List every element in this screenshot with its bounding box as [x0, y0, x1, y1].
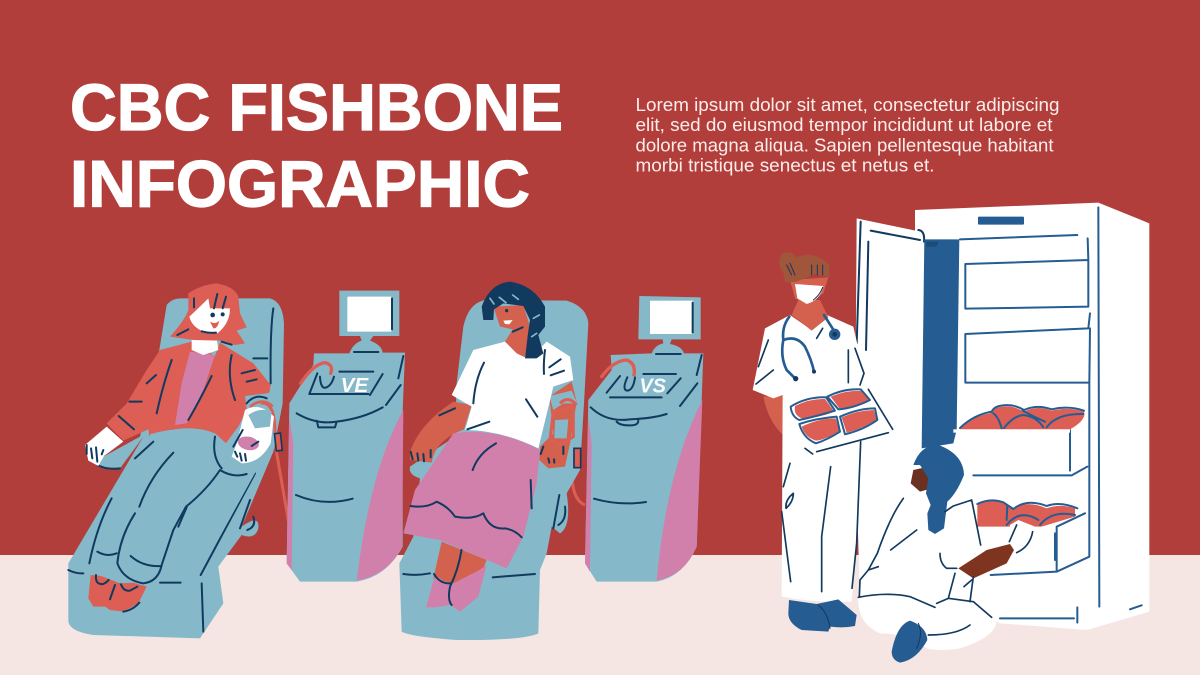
blood bags [791, 389, 877, 443]
neck [792, 300, 828, 331]
body [858, 492, 1033, 650]
arm left [410, 402, 472, 463]
shirt [452, 342, 573, 448]
tube clip [574, 448, 581, 468]
blood storage fridge [855, 203, 1149, 630]
tube and clip [260, 403, 275, 433]
description text: morbi tristique senectus et netus et. [636, 156, 934, 176]
chair 2 [399, 300, 588, 640]
description text [636, 95, 1060, 176]
brown arm [958, 544, 1014, 578]
open door [855, 218, 925, 467]
shoes [88, 575, 147, 612]
title: INFOGRAPHIC [70, 146, 530, 220]
nurse with blood tray [753, 253, 893, 632]
shoes [426, 565, 487, 612]
uniform lines [756, 328, 864, 592]
machine 1 [275, 291, 405, 582]
crouching worker reaching into fridge [858, 444, 1035, 663]
hair [482, 282, 545, 358]
nurse hair [779, 253, 829, 283]
left hand [85, 427, 123, 466]
woman in white shirt on donation chair [399, 282, 588, 640]
face [189, 298, 230, 333]
nurse shoes [788, 599, 857, 632]
hair [913, 444, 964, 534]
interior dark column [922, 239, 959, 448]
tube from machine 1 [275, 443, 290, 530]
hand [1008, 520, 1035, 552]
nurse body [753, 313, 864, 602]
mask [795, 284, 823, 304]
shoe [892, 621, 927, 663]
face [911, 467, 932, 492]
neck and face [493, 305, 530, 357]
tray [790, 385, 893, 454]
right arm with squeeze ball [232, 407, 274, 463]
shirt [175, 352, 215, 425]
description text: elit, sed do eiusmod tempor incididunt ut labore et [636, 115, 1052, 135]
fridge lines [960, 207, 1142, 623]
hair [170, 283, 247, 345]
chair 1 [68, 298, 284, 638]
machine 2: VS [639, 376, 667, 398]
description text: Lorem ipsum dolor sit amet, consectetur adipiscing [636, 95, 1060, 115]
machine 1: VE [341, 374, 369, 397]
skirt [403, 432, 540, 568]
description text: dolore magna aliqua. Sapien pellentesque habitant [636, 136, 1054, 156]
jacket [107, 342, 271, 443]
legs [433, 542, 487, 583]
title [70, 70, 563, 220]
lower shelf meat [977, 501, 1075, 527]
trousers [88, 427, 257, 583]
neck [192, 338, 218, 355]
floor [0, 555, 1200, 675]
handle [978, 217, 1024, 225]
upper shelf meat [960, 406, 1084, 429]
title: CBC FISHBONE [70, 70, 563, 144]
head [790, 277, 828, 303]
machine 2 [572, 296, 703, 582]
woman in red jacket on donation chair [68, 283, 284, 638]
nurse arm [763, 395, 807, 440]
stethoscope [782, 315, 834, 378]
right arm with blood bag [539, 382, 577, 468]
